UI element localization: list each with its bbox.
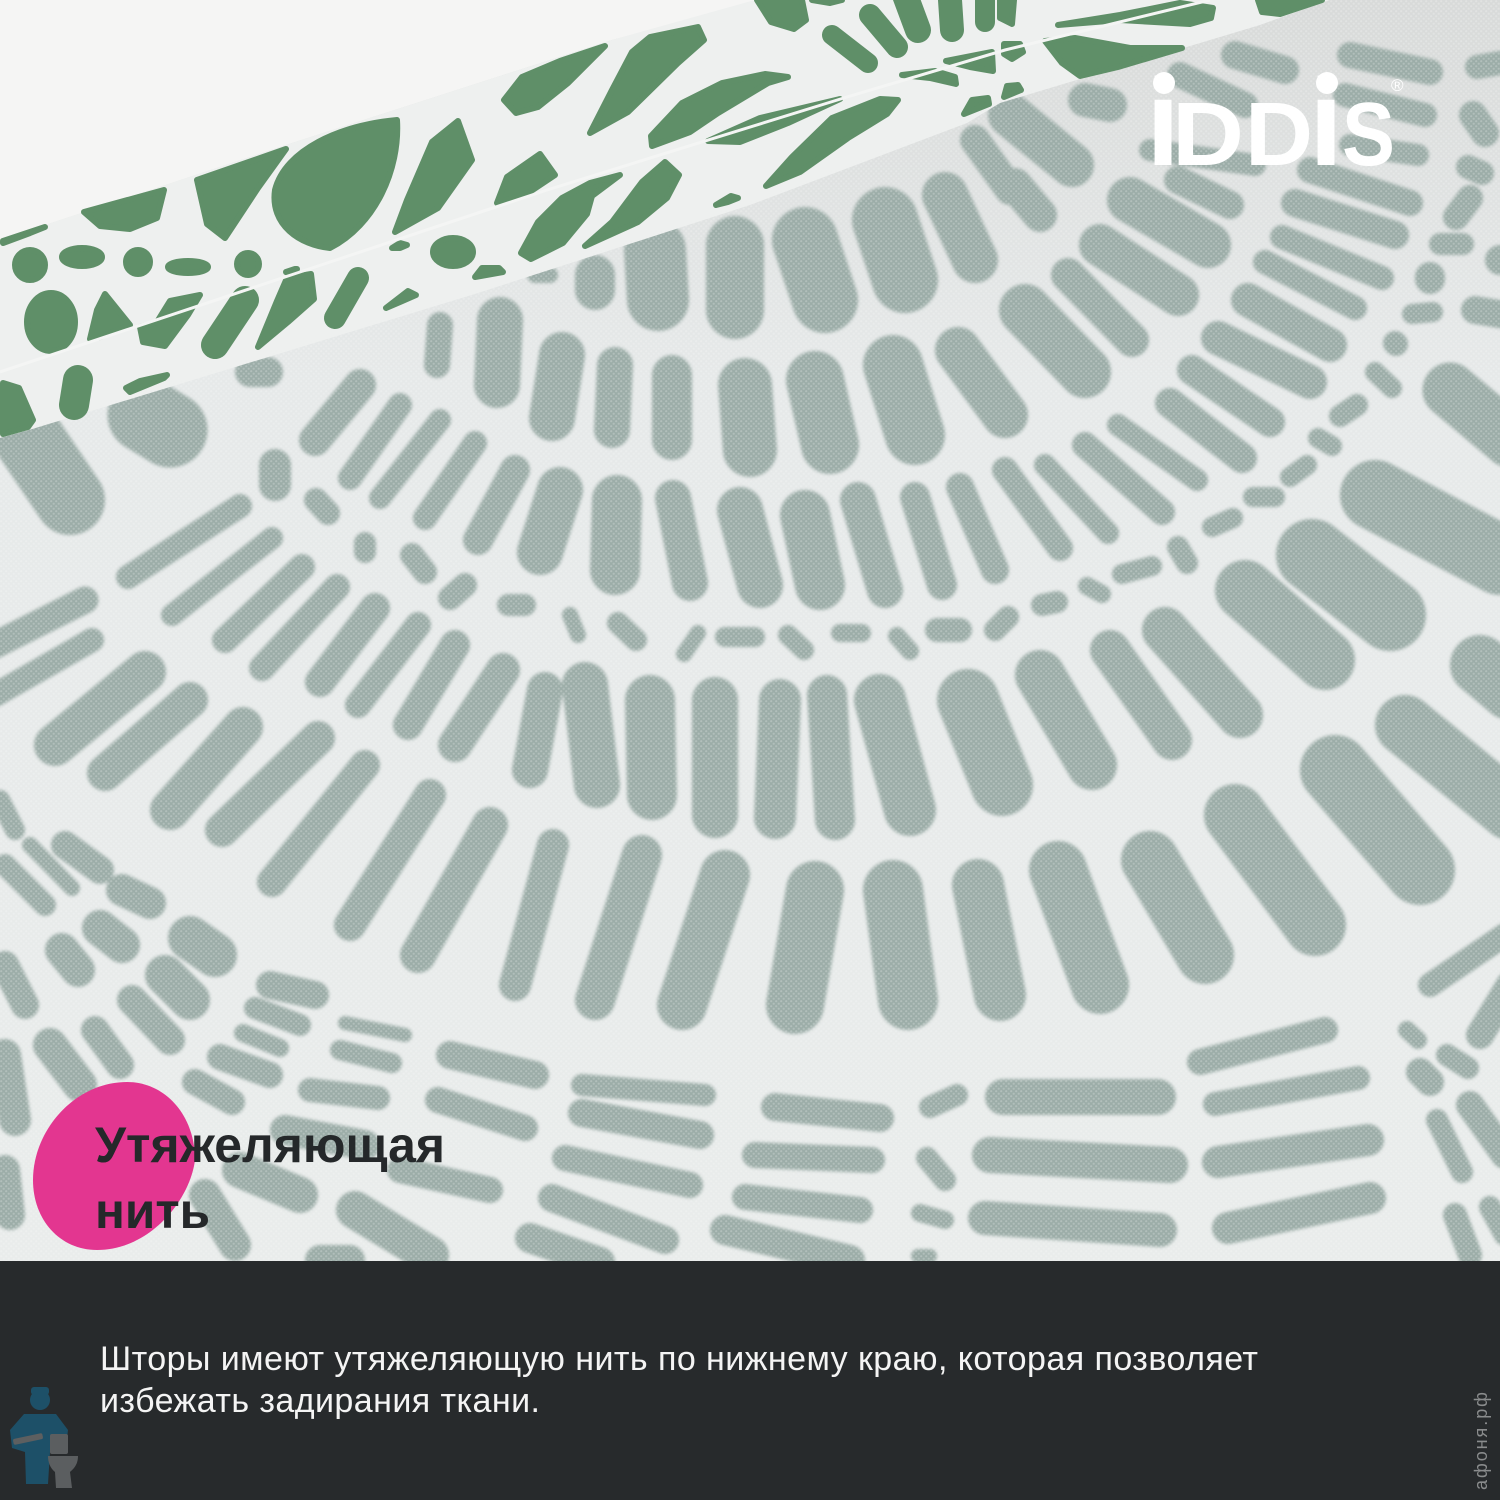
- second row: [552, 355, 562, 418]
- brand logo: IDDIS: ®: [1391, 76, 1404, 95]
- brand logo: IDDIS: D: [1172, 85, 1244, 185]
- left cluster: [30, 440, 70, 500]
- fifth row, centre and right: [530, 690, 545, 770]
- heading: weighted thread: [95, 1117, 445, 1239]
- bottom horizontal rows: [582, 1085, 705, 1095]
- brand logo: IDDIS: S: [1342, 85, 1395, 185]
- watermark icon: plumber with toilet: [10, 1387, 78, 1488]
- heading: weighted thread: Утяжеляющая: [95, 1117, 445, 1173]
- large lower arc: [515, 845, 553, 985]
- green print on the hem: [3, 0, 1322, 434]
- dark footer bar: [0, 1261, 1500, 1500]
- brand logo: IDDIS: i: [1309, 55, 1343, 192]
- brand logo: IDDIS: i: [1146, 55, 1180, 192]
- description text: [100, 1340, 1258, 1420]
- brand logo: IDDIS: [1146, 55, 1404, 192]
- pink accent blob: [33, 1082, 195, 1250]
- heading: weighted thread: нить: [95, 1183, 210, 1239]
- bottom-left cluster: [30, 845, 72, 888]
- hem stitch line: [0, 0, 1210, 372]
- watermark: site name: афоня.рф: [1471, 1392, 1491, 1490]
- green capsule leaves on the hem: [74, 0, 985, 405]
- description text: Шторы имеют утяжеляющую нить по нижнему краю, которая позволяет: [100, 1340, 1258, 1378]
- folded hem band: [0, 0, 1335, 438]
- description text: избежать задирания ткани.: [100, 1382, 540, 1420]
- white backdrop above the hem: [0, 0, 762, 240]
- small diamonds row: [508, 594, 525, 616]
- brand logo: IDDIS: D: [1245, 85, 1313, 185]
- row under the hem: [535, 267, 550, 283]
